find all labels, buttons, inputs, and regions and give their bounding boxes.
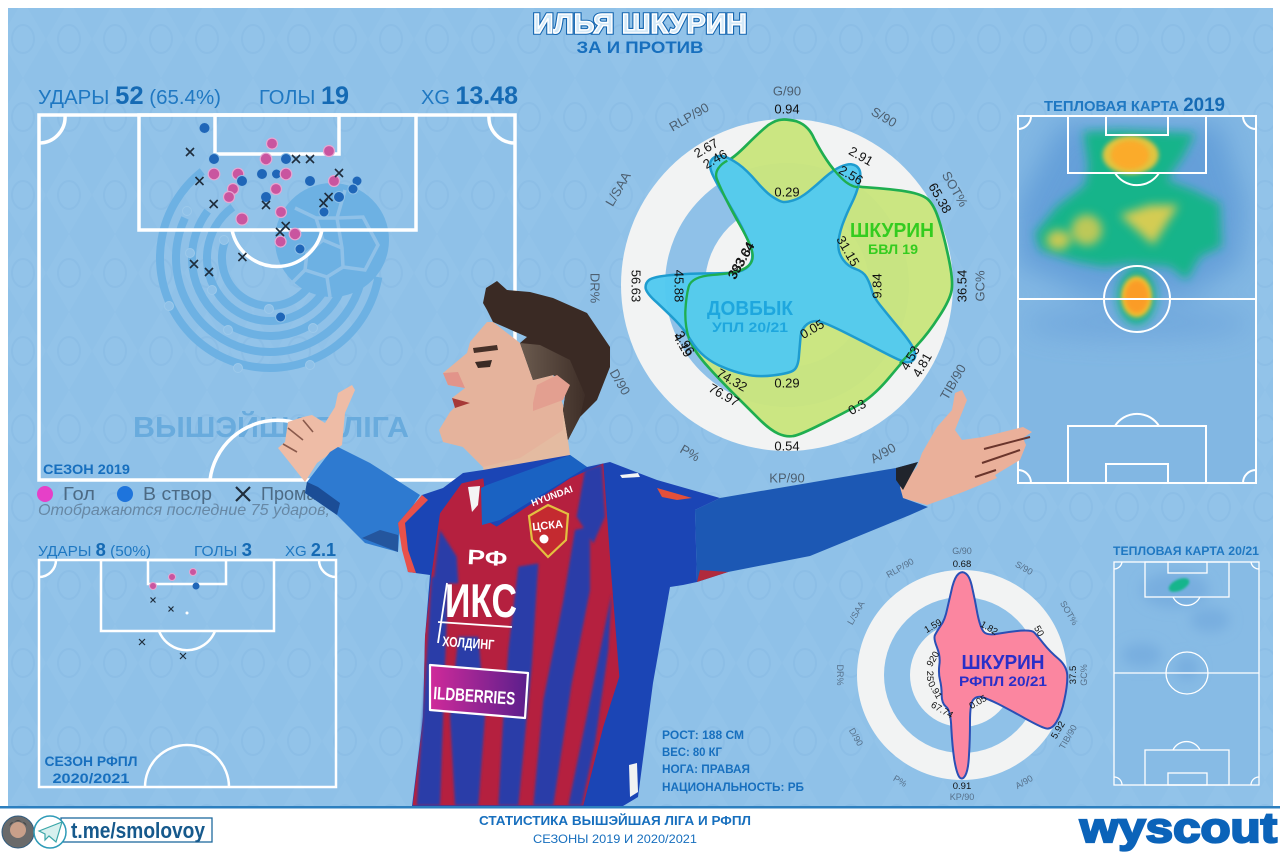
heatmap 2019: [1017, 95, 1256, 483]
radar axis labels: GC%: [972, 270, 988, 302]
radar axis labels: [588, 84, 988, 486]
label: Shkurin BVL: БВЛ 19: [868, 241, 918, 257]
shots: misses: [186, 148, 343, 276]
footer rule: [0, 806, 1280, 808]
radar values: 2.46: [700, 146, 730, 172]
radar axis labels: A/90: [1013, 773, 1035, 791]
jersey text hyundai: HYUNDAI: [530, 484, 574, 509]
radar axis labels: SOT%: [939, 169, 971, 210]
sponsor badge: [430, 665, 528, 718]
stat: xG: XG 2.1: [285, 540, 336, 560]
club crest: ЦСКА: [532, 518, 564, 534]
left hand: [278, 385, 355, 482]
radar rings: [857, 570, 1067, 780]
jersey: [398, 455, 728, 806]
radar values: 4.53: [897, 343, 923, 373]
heatmap title: ТЕПЛОВАЯ КАРТА 20/21: [1113, 544, 1259, 558]
stat: goals: ГОЛЫ 19: [259, 82, 349, 110]
radar axis labels: D/90: [607, 366, 633, 398]
radar axis labels: [835, 546, 1089, 802]
radar values: 0.05: [797, 316, 827, 342]
panel: league logo watermark: [133, 131, 409, 444]
radar values: 31.15: [833, 233, 863, 269]
jersey text RF: РФ: [467, 546, 508, 571]
heat blobs: [1019, 117, 1253, 340]
label: Dovbyk UPL: ДОВБЫК: [707, 298, 794, 320]
shorts crest: [629, 763, 638, 797]
stat: xG: XG 13.48: [421, 82, 518, 110]
radar values: 4.19: [670, 330, 696, 360]
label: Dovbyk UPL: УПЛ 20/21: [712, 319, 788, 335]
radar values: [922, 559, 1079, 792]
pitch lines: [39, 560, 336, 787]
radar values: 393.64: [725, 240, 757, 282]
season label: 2020/2021: [52, 770, 130, 786]
radar values: 45.88: [672, 270, 686, 302]
heatmap surface: [1114, 562, 1259, 785]
legend: Промахи: [261, 484, 335, 504]
radar axis labels: SOT%: [1058, 599, 1080, 627]
radar rings: [621, 119, 953, 451]
radar axis labels: S/90: [869, 104, 899, 130]
handle box: t.me/smolovoy: [71, 818, 206, 843]
label: Shkurin BVL: [850, 220, 934, 257]
radar axis labels: P%: [891, 773, 909, 789]
radar values: 5.92: [1049, 719, 1068, 741]
radar values: 4.81: [909, 350, 935, 380]
radar values: 37.5: [1068, 666, 1079, 684]
footer: source lines: [479, 813, 751, 846]
radar axis labels: DR%: [835, 664, 845, 686]
radar values: 0.94: [774, 102, 800, 116]
season label: СЕЗОН РФПЛ: [44, 753, 138, 769]
radar values: 0.3: [845, 396, 869, 418]
radar values: 1.82: [978, 619, 1000, 638]
icon: avatar: [2, 816, 34, 848]
label: Dovbyk UPL: [707, 298, 794, 335]
radar chart: Shkurin vs Dovbyk: [588, 84, 988, 486]
radar chart: Shkurin RFPL: [835, 546, 1089, 802]
radar axis labels: TIB/90: [1057, 723, 1079, 751]
radar values: 67.74: [929, 700, 955, 721]
radar values: 65.38: [925, 180, 955, 216]
sponsor badge: ILDBERRIES: [433, 683, 516, 709]
radar axis labels: RLP/90: [666, 100, 712, 134]
heat blobs: [1126, 574, 1226, 678]
radar axis labels: TIB/90: [937, 362, 969, 402]
radar values: 0.05: [967, 693, 989, 712]
season label: СЕЗОН 2019: [43, 461, 130, 477]
player bio: ВЕС: 80 КГ: [662, 745, 722, 759]
radar values: 74.32: [714, 365, 750, 395]
radar values: 36.54: [954, 270, 970, 302]
radar values: 0.54: [774, 438, 800, 454]
shots: on target: [199, 122, 362, 322]
sleeve mark: [620, 473, 640, 478]
left arm sleeve: [305, 447, 420, 552]
stat: shots: УДАРЫ 8 (50%): [38, 540, 151, 560]
radar axis labels: GC%: [1079, 664, 1089, 686]
footer: source lines: СТАТИСТИКА ВЫШЭЙШАЯ ЛІГА И РФПЛ: [479, 813, 751, 828]
legend: Гол: [63, 484, 95, 504]
panel: main shot map: [38, 82, 518, 480]
radar axis labels: G/90: [773, 84, 801, 98]
label: Shkurin RFPL: ШКУРИН: [962, 652, 1044, 674]
radar axis labels: DR%: [588, 273, 602, 304]
radar axis labels: G/90: [952, 546, 972, 556]
radar values: 56.63: [628, 270, 644, 302]
shots: on target top layer: [236, 176, 272, 202]
radar values: 0.91: [953, 781, 971, 792]
logo: wyscout: wyscout: [1079, 804, 1277, 851]
heatmap surface: [1018, 116, 1256, 483]
stat: shots: УДАРЫ 52 (65.4%): [38, 82, 221, 110]
jersey sponsor IKS: ИКС: [445, 574, 517, 627]
heatmap title: ТЕПЛОВАЯ КАРТА 2019: [1044, 95, 1225, 116]
label: Shkurin RFPL: [959, 652, 1047, 689]
hair: [483, 281, 610, 440]
radar values: 25: [924, 671, 935, 681]
season label: [44, 753, 138, 786]
radar values: 2.67: [691, 135, 721, 161]
radar values: 0.29: [774, 184, 800, 200]
radar values: 3.96: [672, 328, 698, 358]
neck: [463, 405, 570, 485]
radar axis labels: L/SAA: [845, 599, 867, 627]
pitch lines: [39, 115, 515, 480]
shots: [139, 568, 200, 659]
radar values: 2.56: [836, 162, 866, 188]
footer: author: [2, 816, 212, 848]
player bio: РОСТ: 188 СМ: [662, 728, 744, 742]
title: ИЛЬЯ ШКУРИН: [533, 8, 747, 39]
legend: В створ: [143, 484, 212, 504]
face: [439, 322, 563, 467]
stat: goals: ГОЛЫ 3: [194, 540, 252, 560]
club crest: [529, 505, 568, 557]
player bio: НАЦИОНАЛЬНОСТЬ: РБ: [662, 780, 804, 794]
right hand: [900, 390, 1032, 505]
radar values: [628, 102, 970, 454]
legend: Отображаются последние 75 ударов,: [38, 502, 330, 519]
radar values: 0.68: [953, 559, 971, 570]
ear: [533, 375, 570, 411]
radar shapes: [646, 120, 952, 436]
radar axis labels: KP/90: [950, 792, 974, 802]
radar values: 920: [925, 650, 942, 669]
radar axis labels: L/SAA: [602, 169, 634, 209]
panel: league logo watermark: ВЫШЭЙШАЯ ЛІГА: [133, 410, 409, 444]
subtitle: ЗА И ПРОТИВ: [576, 38, 704, 57]
jersey text holding: ХОЛДИНГ: [442, 633, 495, 653]
sleeve patch: [657, 488, 692, 500]
player figure: [278, 281, 1032, 806]
radar axis labels: KP/90: [769, 470, 805, 486]
radar values: 1.59: [922, 617, 944, 636]
radar axis labels: S/90: [1013, 559, 1035, 577]
legend: [37, 484, 335, 519]
radar values: 76.97: [706, 380, 742, 410]
radar values: 0.91: [925, 679, 944, 701]
icon: telegram: [34, 816, 66, 848]
radar values: 50: [1031, 624, 1046, 639]
player bio: НОГА: ПРАВАЯ: [662, 762, 750, 776]
heatmap pitch lines: [1018, 116, 1256, 483]
radar values: 2.91: [846, 143, 876, 169]
radar axis labels: P%: [677, 441, 703, 465]
sponsor rule: [438, 583, 512, 643]
footer: source lines: СЕЗОНЫ 2019 И 2020/2021: [533, 832, 697, 846]
player bio: [662, 728, 804, 794]
radar axis labels: A/90: [868, 440, 898, 466]
right arm sleeve: [695, 462, 928, 582]
heatmap 20/21: [1113, 544, 1259, 785]
shots: goals: [208, 138, 340, 247]
radar values: 383.84: [725, 239, 757, 281]
label: Shkurin RFPL: РФПЛ 20/21: [959, 673, 1047, 689]
title: ИЛЬЯ ШКУРИН: [533, 8, 747, 39]
radar shape: [934, 572, 1067, 778]
radar values: 0.29: [774, 376, 800, 390]
label: Shkurin BVL: ШКУРИН: [850, 220, 934, 242]
panel: second shot map: [38, 540, 336, 787]
heatmap pitch lines: [1114, 562, 1259, 785]
radar axis labels: D/90: [847, 726, 865, 748]
radar values: 9.84: [870, 273, 884, 299]
radar axis labels: RLP/90: [884, 556, 916, 580]
